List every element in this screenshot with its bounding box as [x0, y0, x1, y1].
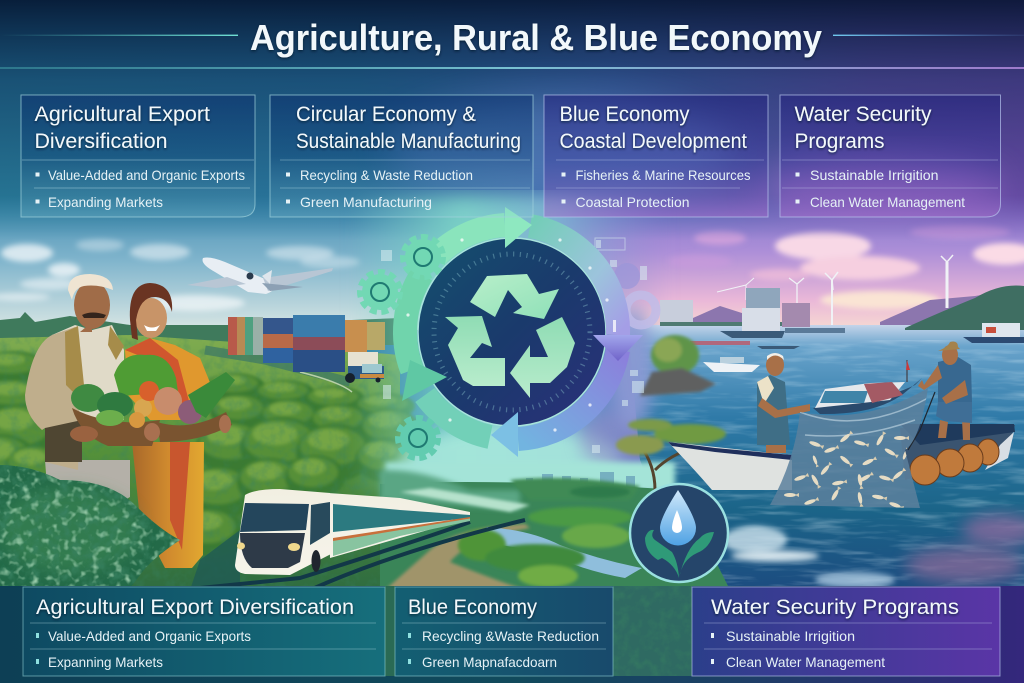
bullets: Recycling & Waste Reduction	[300, 167, 473, 183]
foam and purple wave shadows	[723, 514, 1024, 588]
right sky	[520, 204, 1024, 325]
gear: left	[360, 272, 400, 312]
card: Agricultural Export Diversification (bottom)	[23, 587, 385, 676]
right boat	[900, 424, 1015, 480]
man	[25, 274, 130, 500]
distant left treeline	[0, 312, 400, 345]
far ship	[963, 337, 1024, 343]
right basket	[157, 412, 232, 442]
orange, pink and purple produce	[139, 381, 159, 401]
card: Water Security Programs (bottom)	[692, 587, 1000, 676]
heading: Sustainable Manufacturing	[296, 129, 521, 153]
back boat	[813, 360, 922, 414]
small boat	[703, 362, 760, 372]
heading: Water Security	[794, 102, 932, 126]
heading	[560, 102, 747, 153]
card: Water Security Programs (top)	[780, 95, 1000, 217]
heading	[34, 102, 210, 153]
recycle arrow: top	[470, 274, 559, 319]
title: Agriculture, Rural & Blue Economy	[250, 17, 822, 58]
water drop badge	[630, 484, 728, 582]
title right accent line	[833, 35, 1024, 36]
rocky islet	[640, 335, 716, 396]
tall container	[293, 315, 345, 372]
bullets: Value-Added and Organic Exports	[48, 167, 245, 183]
drop highlight	[672, 510, 682, 533]
mid landscape, city and river	[380, 462, 730, 590]
tick ring	[434, 254, 590, 410]
arc: left	[405, 274, 422, 370]
bullets: Clean Water Management	[810, 194, 965, 210]
bullets: Green Manufacturing	[300, 194, 432, 210]
gears right	[614, 263, 656, 325]
green fields	[0, 335, 400, 586]
lower-left bush	[0, 465, 180, 588]
title left accent line	[0, 35, 238, 36]
bullets: Value-Added and Organic Exports	[48, 628, 251, 644]
lower band background	[0, 586, 1024, 683]
heading: Agricultural Export	[34, 102, 210, 126]
ring dots	[406, 238, 616, 432]
leafy bunch	[114, 355, 178, 396]
rails	[180, 520, 525, 590]
heading: Agricultural Export Diversification	[36, 595, 354, 619]
front white boat	[668, 442, 792, 490]
arc: bottom left	[425, 395, 490, 437]
card: Agricultural Export Diversification (top)	[21, 95, 255, 217]
train	[180, 489, 525, 590]
right clouds	[668, 225, 1024, 309]
dark inner disc	[418, 238, 606, 426]
bullets: Green Mapnafacdoarn	[422, 654, 557, 670]
leaves	[645, 530, 714, 578]
green beans	[188, 372, 235, 418]
arrowhead: right	[593, 335, 643, 361]
left basket	[72, 408, 160, 446]
fishing scene	[668, 342, 1015, 510]
arc: top green	[435, 225, 505, 257]
sea	[628, 325, 1024, 590]
barrels	[910, 439, 999, 485]
center glow	[350, 195, 670, 495]
hands	[70, 426, 98, 442]
dirt path	[385, 524, 530, 590]
field texture	[0, 336, 398, 586]
farmers	[25, 274, 235, 568]
gear: upper	[403, 237, 443, 277]
heading: Diversification	[34, 129, 168, 153]
bullets: Clean Water Management	[726, 654, 885, 670]
net mesh and fish	[784, 398, 928, 510]
field hedgerows	[0, 351, 420, 556]
heading: Programs	[794, 129, 884, 153]
bullets: Coastal Protection	[576, 194, 690, 210]
bullets: Expanning Markets	[48, 654, 163, 670]
woman	[125, 283, 211, 568]
bullets: Sustainable Irrigition	[810, 167, 938, 183]
distant right hills	[693, 295, 980, 325]
port and harbour buildings	[660, 288, 845, 345]
gear: lower	[398, 418, 438, 458]
bullets	[286, 167, 473, 210]
bullets: Recycling &Waste Reduction	[422, 628, 599, 644]
truck cab	[348, 352, 378, 366]
card: Blue Economy (bottom)	[395, 587, 613, 676]
container truck	[228, 315, 385, 383]
fish catch	[784, 431, 909, 510]
scattered data squares	[381, 238, 647, 453]
left sky	[0, 205, 458, 330]
left clouds	[0, 239, 360, 311]
bullets: Fisheries & Marine Resources	[576, 167, 750, 183]
heading: Coastal Development	[560, 129, 747, 153]
bushes	[458, 486, 632, 587]
recycle arrow: right	[510, 317, 575, 398]
bullets	[796, 167, 965, 210]
arrowhead: left	[402, 360, 447, 401]
arrowhead: top	[505, 207, 532, 248]
lone tree	[616, 419, 726, 490]
header rule	[0, 67, 1024, 69]
orange container	[345, 320, 385, 352]
recycle arrow: left	[445, 316, 505, 386]
bullets: Sustainable Irrigition	[726, 628, 855, 644]
fisherman right	[908, 342, 972, 450]
arrowhead: bottom	[491, 412, 518, 457]
card: Blue Economy Coastal Development (top)	[544, 95, 768, 217]
heading: Water Security Programs	[711, 595, 959, 619]
carriage	[328, 493, 470, 558]
blue container	[263, 318, 293, 363]
bullets	[408, 628, 599, 670]
field shadow by rails	[190, 530, 240, 590]
bullets: Expanding Markets	[48, 194, 163, 210]
water drop	[660, 490, 696, 546]
road to truck	[205, 350, 350, 382]
heading	[296, 102, 521, 153]
heading: Circular Economy &	[296, 102, 476, 126]
heading: Blue Economy	[408, 595, 537, 619]
baskets with vegetables	[70, 355, 235, 446]
bullets	[36, 628, 251, 670]
bullets	[562, 167, 750, 210]
heading: Blue Economy	[560, 102, 690, 126]
bullets	[36, 167, 245, 210]
multicolor container	[228, 317, 263, 355]
arc: bottom right	[518, 350, 618, 439]
fish net	[770, 388, 928, 508]
card: Circular Economy (top)	[270, 95, 533, 217]
sea fade into center	[610, 310, 654, 430]
river	[485, 527, 642, 578]
wind turbines	[717, 255, 953, 325]
cabbage and melon	[71, 384, 105, 412]
front cab	[235, 489, 333, 575]
bullets	[711, 628, 885, 670]
landscape scene	[0, 190, 1024, 590]
skies faded into header	[0, 190, 1024, 330]
arc: top right	[530, 226, 618, 335]
fisherman left	[757, 353, 810, 453]
heading	[794, 102, 932, 153]
airplane	[187, 258, 333, 294]
recycling circle infographic	[360, 207, 656, 458]
